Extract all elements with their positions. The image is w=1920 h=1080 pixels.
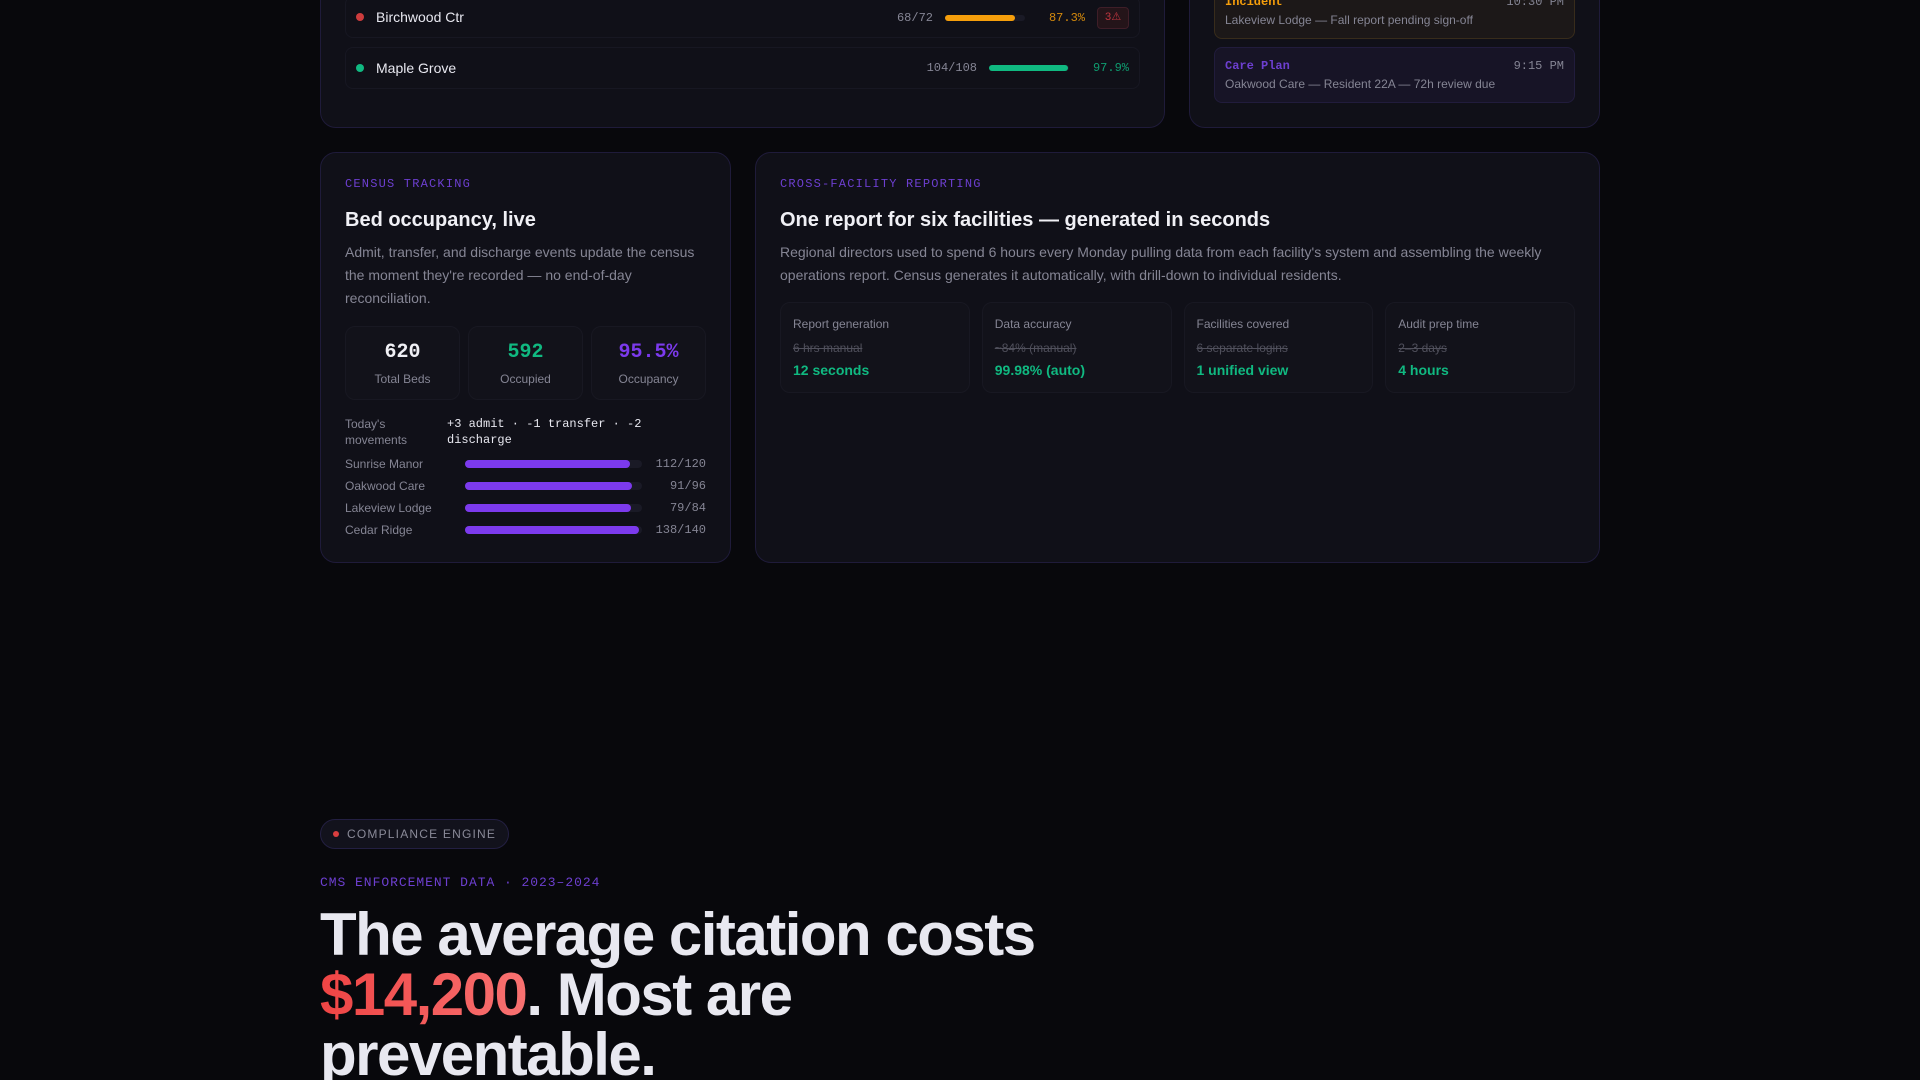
bed count: 104/108 xyxy=(927,61,977,75)
occupancy bar xyxy=(945,15,1025,21)
bar: Lakeview Lodge xyxy=(465,504,642,512)
metric: data accuracy: 99.98% (auto) xyxy=(995,362,1085,378)
metric: audit prep time: 2–3 days xyxy=(1398,341,1447,355)
census description: reconciliation. xyxy=(345,290,431,306)
metric: report generation: 12 seconds xyxy=(793,362,869,378)
alert type: Care Plan xyxy=(1225,59,1290,73)
stat: total beds: 620 xyxy=(384,341,420,364)
bar value: Oakwood Care: 91/96 xyxy=(670,479,706,493)
movements value: +3 admit · -1 transfer · -2 xyxy=(447,417,641,431)
metric: data accuracy xyxy=(982,302,1172,393)
alert badge xyxy=(1097,7,1129,29)
stat: occupancy xyxy=(591,326,706,400)
panel: census tracking xyxy=(320,152,731,563)
bar label: Cedar Ridge: Cedar Ridge xyxy=(345,523,412,537)
pill dot xyxy=(333,831,339,837)
movements label: Today's xyxy=(345,417,385,431)
status dot xyxy=(356,13,364,21)
census description: the moment they're recorded — no end-of-day xyxy=(345,267,632,283)
metric: report generation: Report generation xyxy=(793,317,889,331)
movements label: movements xyxy=(345,433,407,447)
reporting description xyxy=(780,244,1542,283)
metric: report generation: 6 hrs manual xyxy=(793,341,862,355)
metric: facilities covered: 1 unified view xyxy=(1196,362,1288,378)
stat: occupied: 592 xyxy=(507,341,544,364)
metric: data accuracy: ~84% (manual) xyxy=(995,341,1076,355)
alert time: 9:15 PM xyxy=(1514,59,1564,73)
metric: report generation xyxy=(780,302,970,393)
bar: Sunrise Manor xyxy=(465,460,642,468)
bar chart: facility census xyxy=(345,455,706,539)
movements value: discharge xyxy=(447,433,512,447)
alert detail: Lakeview Lodge — Fall report pending sign-off xyxy=(1225,13,1473,27)
bed count: 68/72 xyxy=(897,11,933,25)
metric: facilities covered: Facilities covered xyxy=(1196,317,1289,331)
census description xyxy=(345,244,694,306)
reporting heading: One report for six facilities — generated in seconds xyxy=(780,209,1270,231)
bar value: Lakeview Lodge: 79/84 xyxy=(670,501,706,515)
stat: occupied xyxy=(468,326,583,400)
bar: Oakwood Care xyxy=(465,482,642,490)
movements label xyxy=(345,417,407,447)
metric: data accuracy: Data accuracy xyxy=(995,317,1071,331)
section headline xyxy=(320,901,1035,1080)
stat: occupied: Occupied xyxy=(500,372,551,386)
bar label: Lakeview Lodge: Lakeview Lodge xyxy=(345,501,432,515)
reporting tag: CROSS-FACILITY REPORTING xyxy=(780,177,982,191)
metric: facilities covered xyxy=(1184,302,1373,393)
panel: alerts feed xyxy=(1189,0,1600,128)
bar value: Sunrise Manor: 112/120 xyxy=(656,457,706,471)
row: Birchwood Ctr xyxy=(345,0,1140,38)
alert: care plan xyxy=(1214,47,1575,103)
stat: total beds: Total Beds xyxy=(374,372,431,386)
bar label: Oakwood Care: Oakwood Care xyxy=(345,479,425,493)
census heading: Bed occupancy, live xyxy=(345,209,536,231)
alert detail: Oakwood Care — Resident 22A — 72h review due xyxy=(1225,77,1495,91)
metric: facilities covered: 6 separate logins xyxy=(1196,341,1288,355)
metric: audit prep time: 4 hours xyxy=(1398,362,1449,378)
alert: incident xyxy=(1214,0,1575,39)
reporting description: operations report. Census generates it automatically, with drill-down to individual residents. xyxy=(780,267,1342,283)
pill text: COMPLIANCE ENGINE xyxy=(347,827,496,841)
census tag: CENSUS TRACKING xyxy=(345,177,471,191)
facility name: Birchwood Ctr xyxy=(376,9,464,25)
occupancy bar xyxy=(989,65,1069,71)
panel: facility list xyxy=(320,0,1165,128)
stat: occupancy: 95.5% xyxy=(618,341,678,364)
alert badge: 3⚠ xyxy=(1105,12,1121,24)
metric: audit prep time xyxy=(1385,302,1575,393)
census description: Admit, transfer, and discharge events update the census xyxy=(345,244,694,260)
facility name: Maple Grove xyxy=(376,60,456,76)
bar label: Sunrise Manor: Sunrise Manor xyxy=(345,457,423,471)
section pill: compliance engine xyxy=(320,819,509,849)
stat: total beds xyxy=(345,326,460,400)
stat: occupancy: Occupancy xyxy=(618,372,679,386)
occupancy percent: 97.9% xyxy=(1093,61,1129,75)
bar: Cedar Ridge xyxy=(465,526,642,534)
section headline: The average citation costs xyxy=(320,901,1035,968)
metric: audit prep time: Audit prep time xyxy=(1398,317,1479,331)
occupancy percent: 87.3% xyxy=(1049,11,1085,25)
movements value xyxy=(447,417,641,447)
section eyebrow: CMS ENFORCEMENT DATA · 2023–2024 xyxy=(320,875,600,890)
status dot xyxy=(356,64,364,72)
section headline: $14,200. Most are xyxy=(320,961,791,1028)
bar value: Cedar Ridge: 138/140 xyxy=(656,523,706,537)
panel: cross-facility reporting xyxy=(755,152,1600,563)
reporting description: Regional directors used to spend 6 hours every Monday pulling data from each facility's system and assembling the weekly xyxy=(780,244,1541,260)
row: Maple Grove xyxy=(345,47,1140,89)
